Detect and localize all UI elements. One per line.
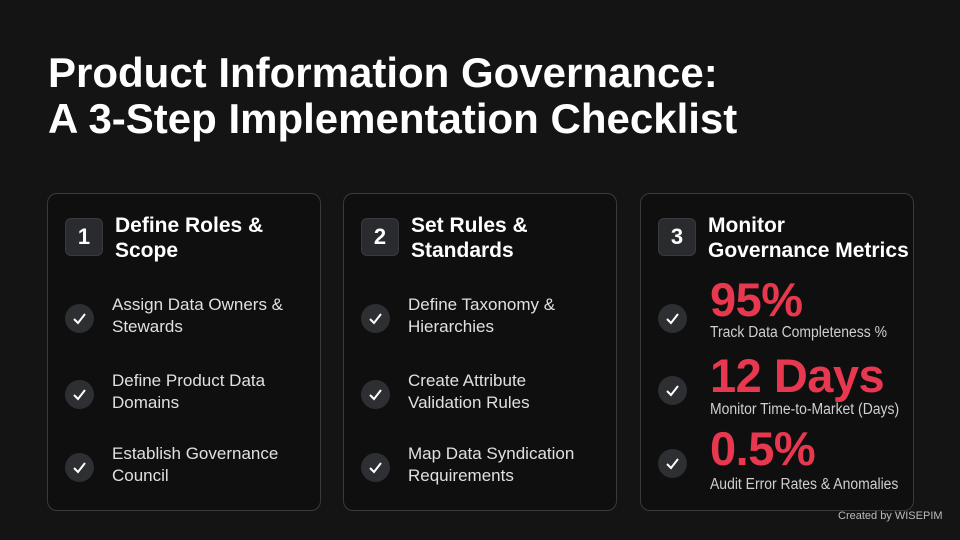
heading 2: Set Rules & [411,214,528,237]
metric 3 [658,422,898,493]
metric 2: 12 Days [710,349,884,402]
title: Product Information Governance: [48,49,718,96]
item 2.1: Hierarchies [408,317,494,336]
panel: step 3 [640,193,914,511]
number badge 3: 3 [671,224,683,249]
number badge 1: 1 [78,224,90,249]
heading 1: Scope [115,239,178,262]
heading 2 [411,214,528,262]
title: A 3-Step Implementation Checklist [48,95,737,142]
item 1.3: Establish Governance [112,444,278,463]
item 2.3: Map Data Syndication [408,444,574,463]
number badge 2 [361,218,399,256]
item 2.2: Validation Rules [408,393,530,412]
metric 2: Monitor Time-to-Market (Days) [710,401,899,418]
item 2.2 [361,371,530,412]
item 1.3 [65,444,278,485]
metric 1 [658,273,887,341]
heading 3: Governance Metrics [708,239,909,262]
footer credit: Created by WISEPIM [838,510,943,522]
heading 1: Define Roles & [115,214,263,237]
heading 3 [708,214,909,262]
panel: step 1 [47,193,321,511]
item 1.1 [65,295,283,336]
item 1.1: Stewards [112,317,183,336]
item 1.2 [65,371,266,412]
item 1.2: Define Product Data [112,371,265,390]
number badge 1 [65,218,103,256]
title [48,49,737,142]
item 2.3 [361,444,574,485]
item 2.2: Create Attribute [408,371,526,390]
heading 2: Standards [411,239,514,262]
item 2.1: Define Taxonomy & [408,295,555,314]
metric 2 [658,349,899,418]
heading 3: Monitor [708,214,785,237]
item 2.1 [361,295,555,336]
item 2.3: Requirements [408,466,514,485]
metric 3: Audit Error Rates & Anomalies [710,476,898,493]
heading 1 [115,214,263,262]
number badge 2: 2 [374,224,386,249]
panel: step 2 [343,193,617,511]
metric 1: Track Data Completeness % [710,324,887,341]
item 1.1: Assign Data Owners & [112,295,283,314]
number badge 3 [658,218,696,256]
item 1.3: Council [112,466,169,485]
metric 3: 0.5% [710,422,815,475]
item 1.2: Domains [112,393,179,412]
metric 1: 95% [710,273,803,326]
